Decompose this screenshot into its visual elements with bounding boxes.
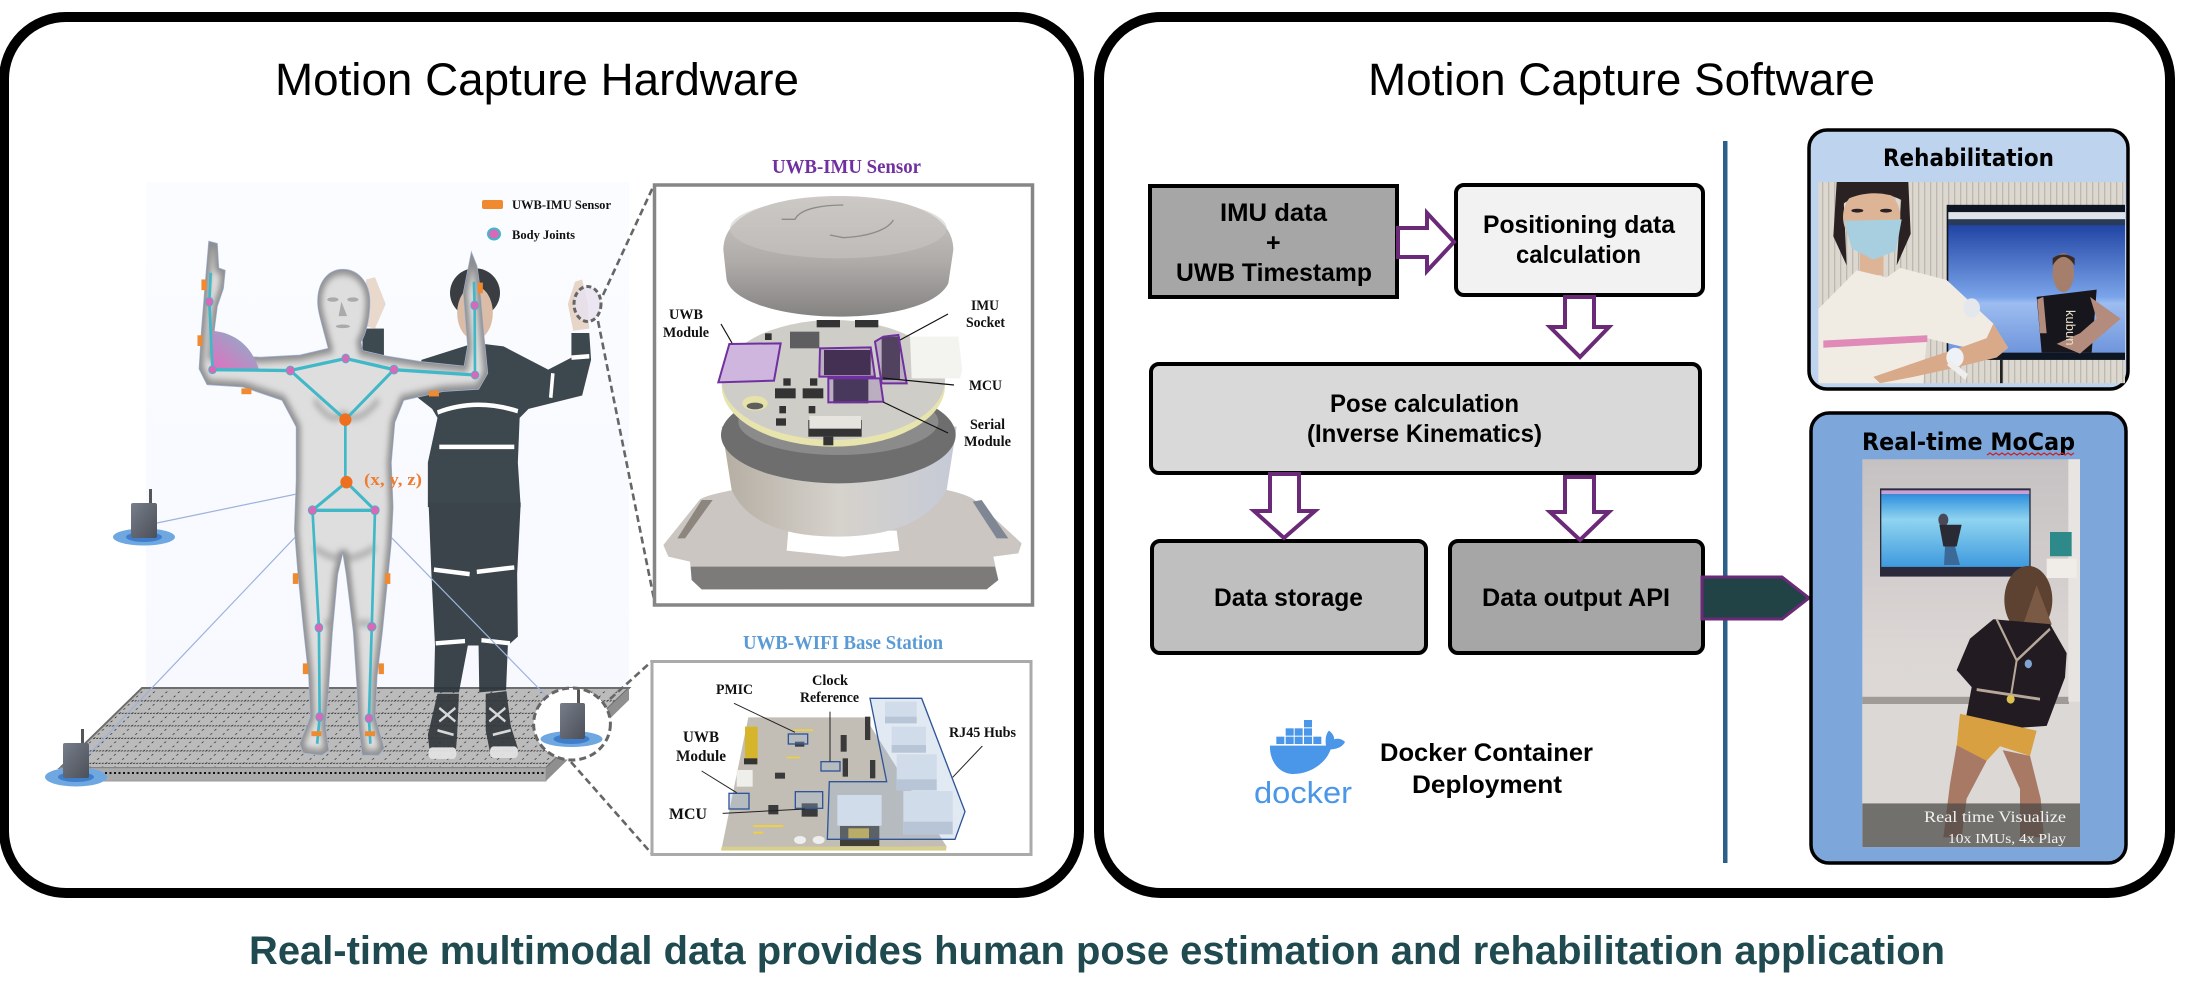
person in black tracksuit	[362, 268, 591, 759]
box: IMU data + UWB timestamp: +	[1266, 229, 1281, 257]
box: data output API	[1450, 541, 1703, 653]
board part labels: Clock	[812, 673, 849, 689]
mocap photo	[1862, 459, 2080, 847]
base station: left middle	[113, 489, 175, 546]
box: IMU data + UWB timestamp	[1150, 186, 1397, 297]
box: pose calculation	[1151, 364, 1700, 473]
sensor part labels: Module	[964, 434, 1012, 450]
board part labels	[669, 673, 1016, 823]
coordinate label: (x, y, z)	[364, 470, 422, 489]
root joints	[339, 413, 352, 488]
mannequin shading	[199, 242, 487, 755]
docker logo	[1254, 720, 1352, 810]
avatar shirt logo text: kubun	[2063, 310, 2078, 345]
box: pose calculation: (Inverse Kinematics)	[1307, 420, 1542, 448]
docker deployment text: Docker Container	[1380, 739, 1593, 767]
box: positioning data calculation: calculation	[1516, 241, 1641, 269]
lines from base stations to hip	[72, 485, 550, 772]
docker logo: docker	[1254, 775, 1352, 810]
board part labels: UWB	[683, 729, 719, 746]
sensor render	[663, 196, 1022, 589]
vertical divider	[1723, 141, 1728, 863]
spell-check squiggle	[1987, 453, 2074, 455]
panel: base station board	[652, 662, 1031, 854]
heading: real-time mocap: Real-time MoCap	[1862, 428, 2075, 456]
sensor part labels: UWB	[669, 307, 703, 323]
panel: rehabilitation	[1809, 130, 2128, 389]
mannequin body	[199, 242, 487, 755]
photo caption: Real time Visualize	[1924, 809, 2066, 826]
skeleton lines	[209, 273, 475, 744]
arrow: IMU to positioning	[1398, 213, 1454, 271]
board render	[702, 698, 982, 851]
legend: UWB-IMU sensor and body joints: UWB-IMU Sensor	[512, 198, 611, 212]
dashed callout lines	[571, 185, 655, 854]
box: IMU data + UWB timestamp: UWB Timestamp	[1176, 259, 1372, 287]
IMU sensors on body	[197, 279, 483, 736]
legend: UWB-IMU sensor and body joints	[482, 198, 611, 242]
box: positioning data calculation	[1456, 185, 1703, 295]
UWB-WIFI base station heading: UWB-WIFI Base Station	[743, 632, 943, 654]
box: pose calculation: Pose calculation	[1330, 390, 1519, 418]
arrow: pose to storage	[1254, 474, 1315, 538]
photo caption	[1924, 809, 2066, 847]
shoes	[428, 691, 518, 759]
arrow: pose to output	[1550, 477, 1609, 540]
rehabilitation photo	[1818, 182, 2125, 383]
heading: rehabilitation: Rehabilitation	[1883, 144, 2054, 172]
board part labels: MCU	[669, 806, 707, 823]
sensor part labels: Serial	[970, 417, 1005, 433]
base station: front left	[45, 729, 107, 786]
box: data output API: Data output API	[1482, 584, 1670, 612]
docker deployment text: Deployment	[1412, 771, 1563, 799]
board part labels: PMIC	[716, 682, 753, 698]
body joints	[205, 297, 479, 723]
sensor part labels	[663, 298, 1012, 450]
UWB-IMU sensor heading: UWB-IMU Sensor	[772, 156, 921, 178]
box: positioning data calculation: Positioning data	[1483, 211, 1676, 239]
mannequin with skeleton	[197, 242, 487, 755]
panel: motion capture hardware	[4, 17, 1079, 893]
panel: real-time mocap	[1811, 413, 2126, 863]
photo caption: 10x IMUs, 4x Play	[1948, 832, 2066, 847]
board part labels: Module	[676, 748, 726, 765]
base station: zoom lens	[534, 688, 610, 760]
sensor part labels: MCU	[969, 378, 1002, 394]
heading: hardware: Motion Capture Hardware	[275, 54, 799, 105]
box: data storage: Data storage	[1214, 584, 1363, 612]
shoulder angle wedge	[212, 331, 259, 370]
panel: motion capture software	[1099, 17, 2170, 893]
box: data storage	[1152, 541, 1426, 653]
wrist sensor lens	[574, 286, 601, 322]
leader lines	[721, 314, 954, 433]
arrow: positioning to pose	[1550, 297, 1609, 357]
docker deployment text	[1380, 739, 1593, 799]
sensor part labels: IMU	[971, 298, 999, 314]
board part labels: Reference	[800, 690, 860, 706]
floor platform	[60, 688, 629, 781]
board part labels: RJ45 Hubs	[949, 725, 1016, 741]
bottom caption: Real-time multimodal data provides human pose estimation and rehabilitation application	[249, 929, 1945, 973]
heading: software: Motion Capture Software	[1368, 54, 1875, 105]
panel: sensor exploded view	[654, 185, 1032, 605]
purple highlight boxes	[718, 335, 907, 402]
sensor part labels: Socket	[966, 315, 1005, 331]
sensor part labels: Module	[663, 325, 710, 341]
arrow: output to applications	[1702, 577, 1809, 619]
scene: capture room background	[146, 182, 629, 692]
box: IMU data + UWB timestamp: IMU data	[1220, 199, 1328, 227]
legend: UWB-IMU sensor and body joints: Body Joints	[512, 228, 575, 242]
